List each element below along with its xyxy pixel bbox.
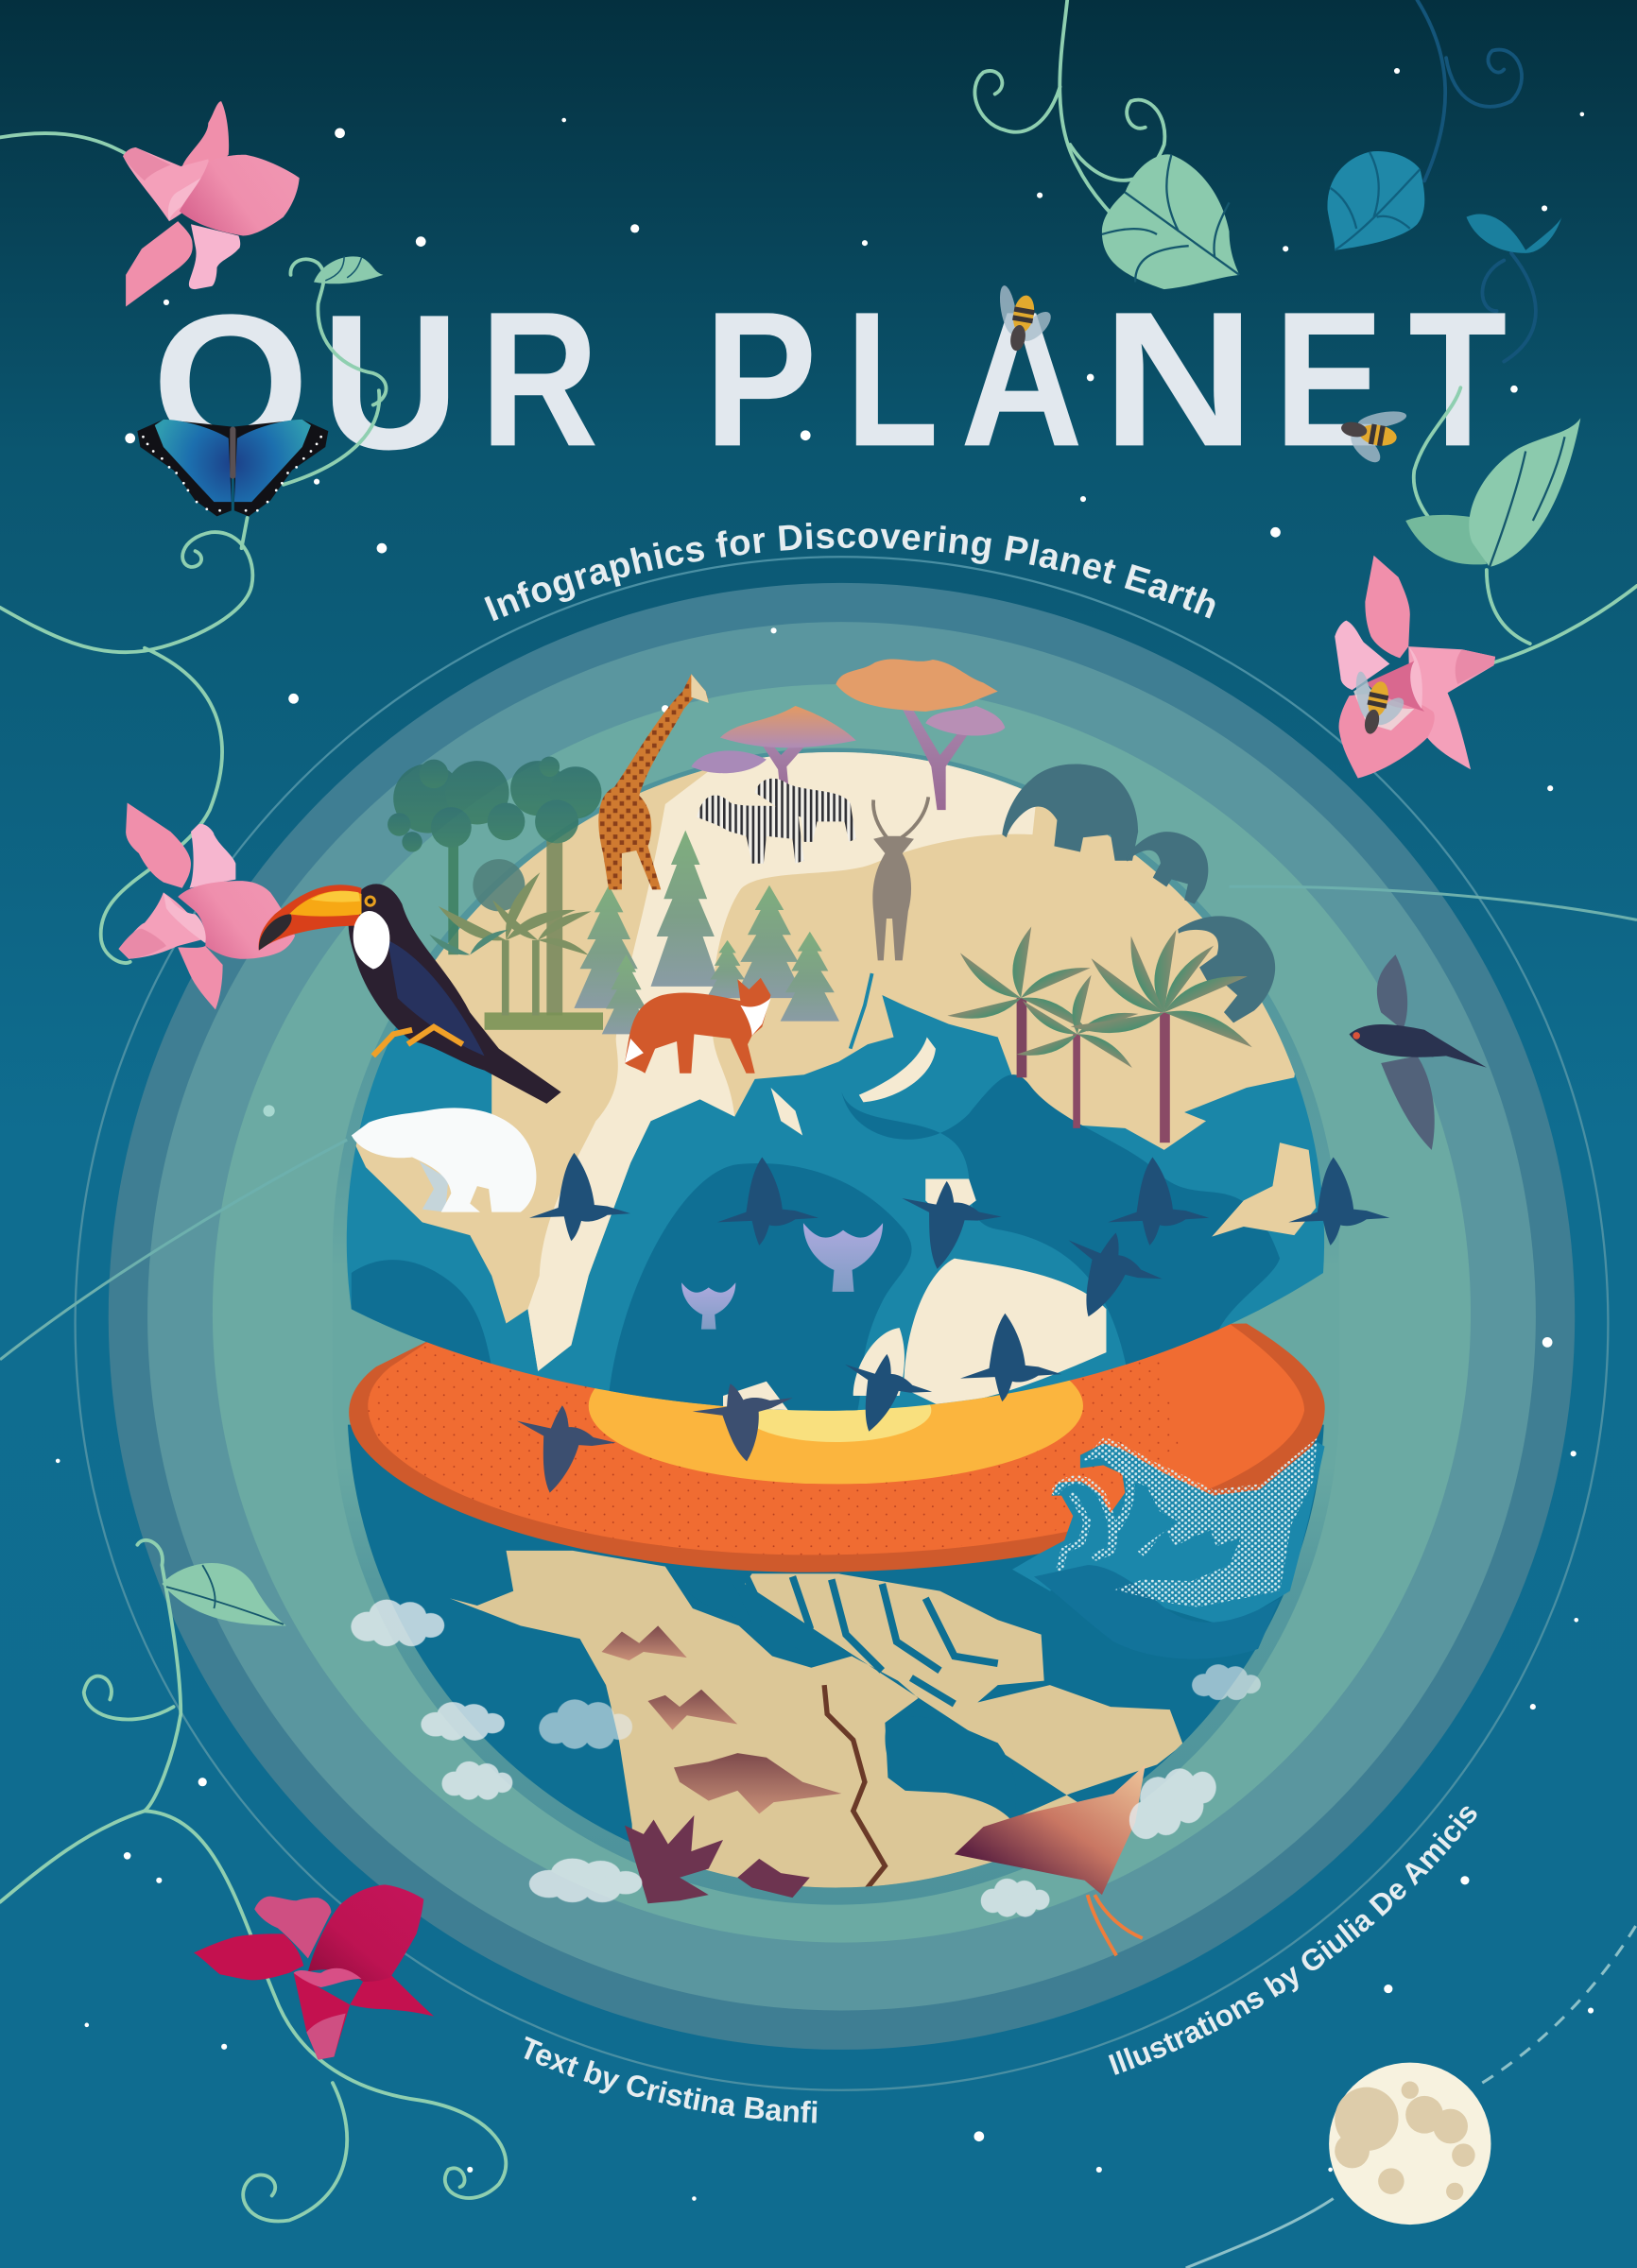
earth mantle: orange slice (349, 1324, 1325, 1572)
butterfly (137, 420, 328, 516)
giraffe (598, 674, 709, 889)
subtitle: Infographics for Discovering Planet Earth (484, 523, 1215, 622)
leaf: teal (1327, 151, 1424, 250)
upper hemisphere of the globe (346, 752, 1325, 1411)
atmosphere rings (76, 557, 1608, 2090)
fir trees (574, 831, 839, 1034)
antelope (872, 797, 928, 960)
title (152, 272, 1507, 490)
hudson bay (885, 1729, 1009, 1818)
crack (824, 1685, 885, 1895)
geese flock (506, 1153, 1389, 1503)
title: T (1408, 272, 1507, 487)
ocean wave (1012, 1437, 1325, 1659)
zebras (697, 779, 856, 864)
leaf: small teal (1466, 214, 1561, 253)
whale tails (681, 1223, 883, 1330)
title: U (321, 275, 460, 490)
leaf: top green (1102, 154, 1239, 289)
illustrator credit: Illustrations by Giulia De Amicis (1108, 1807, 1476, 2075)
lower hemisphere of the globe (348, 1425, 1324, 1888)
thin channel (851, 973, 872, 1049)
title: E (1274, 272, 1384, 487)
flower: right pink (1335, 556, 1495, 778)
dark ocean (608, 1163, 912, 1425)
acacia trees (691, 659, 1005, 810)
tan land (355, 752, 1295, 1371)
inner core (740, 1379, 931, 1442)
moon (1329, 2063, 1491, 2225)
clouds (351, 1600, 1261, 1917)
polar bear (352, 1108, 536, 1212)
orbit lines (0, 886, 1637, 1360)
left lava field (625, 1815, 810, 1903)
elephants (1002, 764, 1296, 1026)
volcano (955, 1764, 1146, 1955)
author credit: Text by Cristina Banfi (524, 2036, 817, 2122)
title: A (960, 272, 1083, 487)
leaf: small green near title (314, 256, 383, 284)
cream land (527, 695, 1042, 1371)
dark blue vine (1417, 0, 1536, 362)
title: O (152, 275, 309, 490)
bees (987, 282, 1414, 741)
leaf: bottom left green (162, 1563, 286, 1625)
title: P (704, 272, 817, 487)
left forest (388, 757, 603, 1030)
lower land mass (450, 1550, 1183, 1888)
islands and arctic land (859, 1037, 936, 1102)
flower: crimson (194, 1884, 434, 2060)
palm trees (947, 927, 1257, 1143)
title: L (846, 272, 939, 487)
fox (625, 978, 771, 1074)
mountains (601, 1625, 841, 1813)
toucan (259, 884, 561, 1104)
flower: left pink (118, 802, 295, 1009)
arctic channels (668, 1570, 752, 1623)
outer core (589, 1328, 1083, 1484)
flower: top-left pink (123, 101, 300, 306)
swallow (1350, 954, 1487, 1150)
moon orbit (1186, 1924, 1637, 2268)
leaves: right green (1405, 418, 1580, 567)
title: R (480, 272, 598, 487)
title: N (1102, 272, 1255, 487)
